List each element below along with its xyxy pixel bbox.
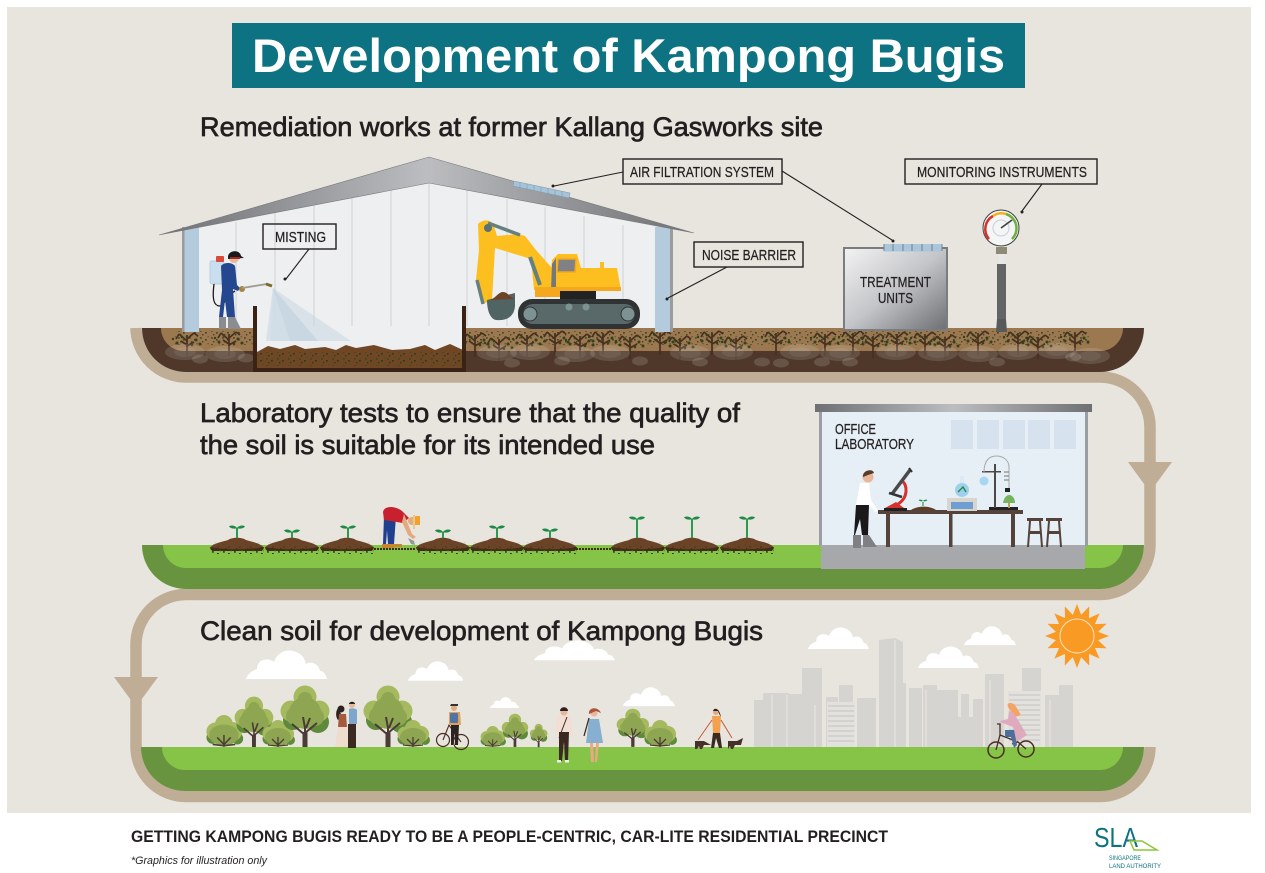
SLA logo [1094, 822, 1161, 870]
treatment units [844, 244, 947, 330]
man and woman walking [555, 707, 603, 762]
footer tagline: GETTING KAMPONG BUGIS READY TO BE A PEOPLE-CENTRIC, CAR-LITE RESIDENTIAL PRECINCT [131, 827, 889, 846]
SLA logo: SINGAPORE [1109, 856, 1141, 862]
label: monitoring instruments [905, 159, 1097, 214]
process flow band with arrows [114, 328, 1172, 796]
treatment units: TREATMENT [860, 274, 931, 291]
trees [206, 686, 677, 747]
couple [335, 702, 357, 748]
label: noise barrier: NOISE BARRIER [702, 247, 796, 264]
SLA logo: LAND AUTHORITY [1109, 864, 1161, 870]
dog walker [695, 709, 743, 749]
office laboratory [815, 404, 1092, 569]
retort stand apparatus [980, 456, 1018, 510]
monitoring gauge [983, 210, 1019, 332]
farmer bending [382, 507, 420, 548]
city skyline [754, 638, 1073, 747]
excavation pit [253, 306, 466, 372]
office laboratory: LABORATORY [835, 436, 914, 453]
clouds [246, 626, 1016, 708]
heading: laboratory tests: the soil is suitable for its intended use [200, 430, 655, 460]
office laboratory: OFFICE [835, 421, 876, 438]
title: Development of Kampong Bugis [252, 29, 1005, 82]
microscope [884, 468, 912, 511]
footnote: *Graphics for illustration only [131, 855, 268, 867]
heading: remediation: Remediation works at former Kallang Gasworks site [200, 112, 823, 142]
label: air filtration system [552, 159, 894, 242]
excavator [476, 220, 640, 329]
SLA logo: SLA [1094, 822, 1138, 853]
cyclist with backpack [436, 704, 468, 750]
mist spray [266, 288, 351, 341]
treatment units: UNITS [878, 290, 913, 307]
lab technician [853, 470, 878, 548]
air filtration unit [513, 181, 570, 198]
ground: soil tier [142, 328, 1144, 372]
label: monitoring instruments: MONITORING INSTRUMENTS [917, 164, 1087, 181]
woman on bicycle [988, 703, 1034, 758]
label: misting [263, 224, 336, 280]
ground: green tier 2 [142, 545, 1144, 589]
worker with sprayer [210, 251, 272, 329]
soil sample [911, 500, 936, 510]
lab table and stools [878, 510, 1062, 547]
heading: laboratory tests [200, 398, 740, 460]
label: air filtration system: AIR FILTRATION SYSTEM [630, 164, 774, 181]
label: misting: MISTING [275, 229, 326, 246]
heading: laboratory tests: Laboratory tests to ensure that the quality of [200, 398, 740, 428]
ground: green tier 3 [141, 747, 1144, 791]
sun [1045, 604, 1109, 668]
soil mounds with sprouts [210, 517, 774, 554]
scale with flask [947, 476, 977, 511]
heading: clean soil: Clean soil for development of Kampong Bugis [200, 616, 763, 646]
building: remediation enclosure [159, 157, 694, 332]
label: noise barrier [666, 242, 803, 300]
